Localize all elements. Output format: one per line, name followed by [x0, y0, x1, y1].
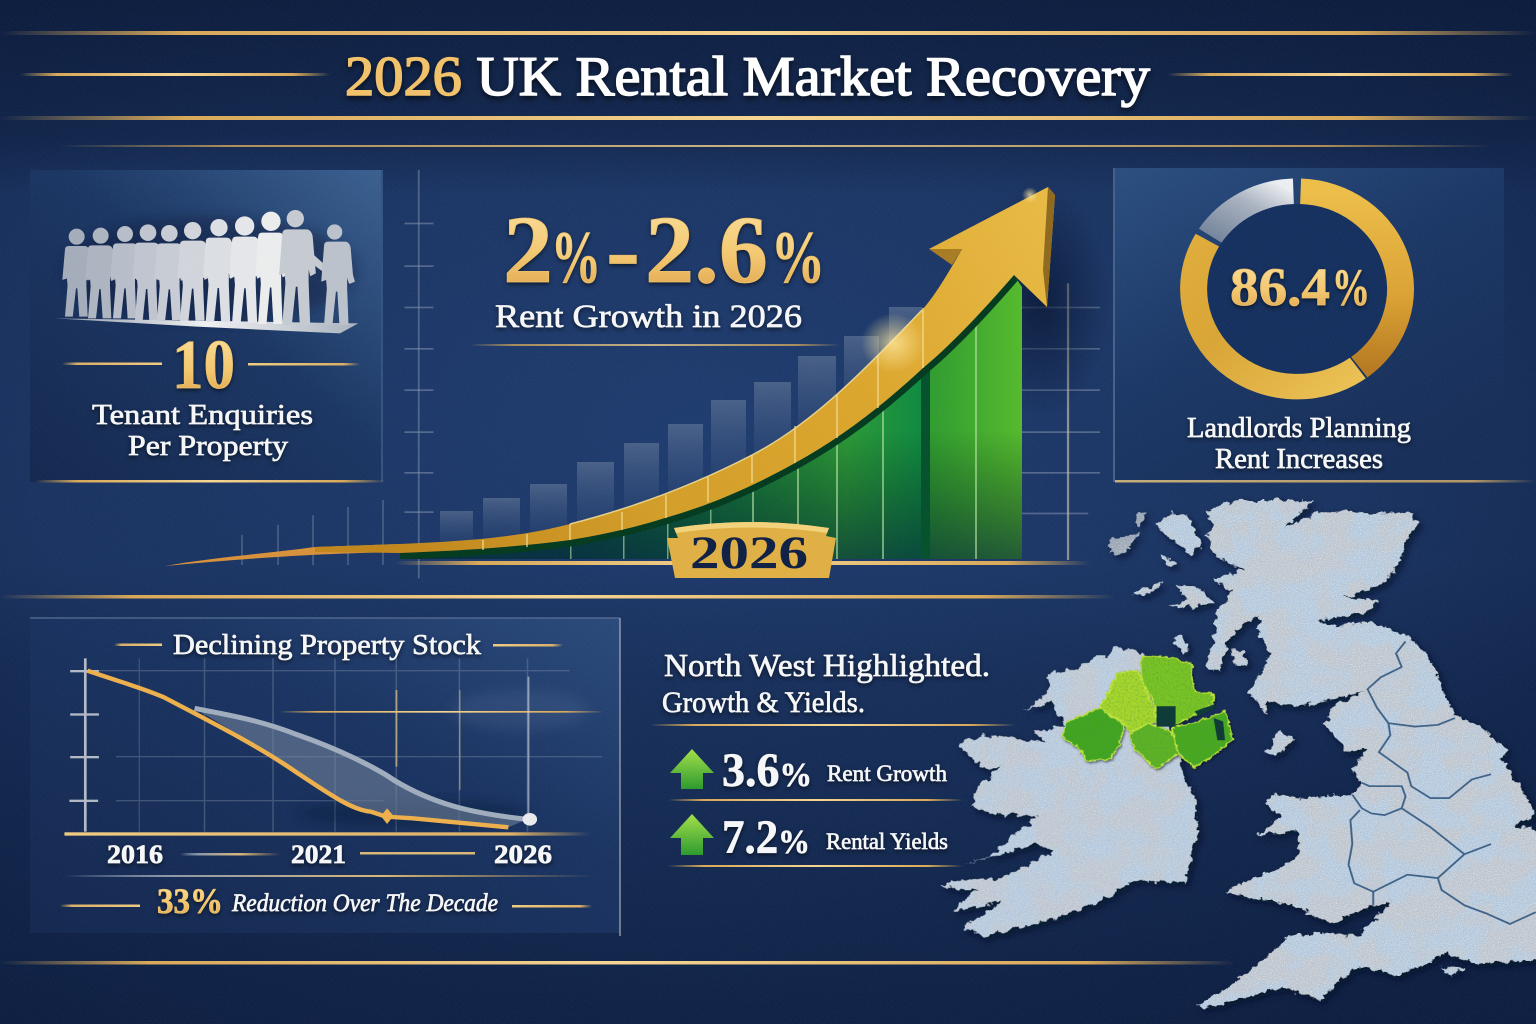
line chart: [64, 658, 604, 836]
callout: 33% reduction: [60, 881, 592, 921]
axis years: 2026: [494, 840, 552, 869]
label: tenant enquiries per property: Per Property: [128, 430, 289, 462]
small ticks left of chart: [241, 500, 384, 565]
stat: rent growth range: %: [771, 217, 825, 299]
heading: North West Highlighted.: [664, 647, 990, 683]
section rule: [0, 595, 1115, 598]
Lough Neagh and Strangford Lough: [1157, 704, 1225, 740]
Ireland: [940, 646, 1198, 936]
label: rent growth in 2026: Rent Growth in 2026: [495, 299, 802, 335]
green bars: [400, 270, 1022, 559]
label: landlords planning rent increases: [1187, 413, 1411, 475]
title: 2026 UK Rental Market Recovery: [345, 46, 1150, 108]
panel: landlords donut: [1113, 168, 1536, 482]
header rules: [0, 31, 1536, 147]
badge: 2026: [667, 522, 836, 579]
chart grid: [404, 170, 1100, 578]
bottom rule: [0, 961, 1235, 964]
heading: Declining Property Stock: [173, 629, 482, 661]
metric: rent growth: [668, 744, 963, 801]
label: tenant enquiries per property: [92, 399, 313, 462]
callout: 33% reduction: Reduction Over The Decade: [231, 890, 498, 917]
metric: rental yields: 7.2%: [722, 811, 810, 864]
England and Wales region borders: [1348, 641, 1536, 924]
axis years: 2016: [107, 840, 163, 869]
panel: rent growth chart: [165, 170, 1110, 579]
heading: [650, 647, 1015, 726]
metric: rental yields: Rental Yields: [826, 829, 948, 854]
panel: tenant enquiries: [30, 170, 385, 482]
panel: declining property stock: [30, 617, 621, 936]
metric: rent growth: 3.6%: [722, 744, 812, 797]
donut chart: [1194, 191, 1401, 387]
stat: 10: 10: [172, 327, 235, 404]
heading: Growth & Yields.: [662, 686, 865, 719]
label: landlords planning rent increases: Rent Increases: [1215, 444, 1383, 475]
stat: 86.4%: [1230, 257, 1370, 317]
baseline: [395, 561, 1090, 565]
stat: 86.4%: %: [1332, 260, 1370, 317]
icon: up arrow: [670, 814, 714, 855]
label: landlords planning rent increases: Landlords Planning: [1187, 413, 1411, 444]
stat: rent growth range: 2: [503, 196, 553, 303]
stat: rent growth range: %: [551, 217, 601, 299]
axis years: [107, 840, 552, 869]
grey bars: [440, 307, 922, 551]
metric: rent growth: Rent Growth: [827, 761, 947, 786]
axis years: 2021: [291, 840, 346, 869]
stat: rent growth range: 2.6: [645, 196, 768, 303]
stat: rent growth range: -: [606, 196, 640, 303]
arrow: rising gold trend: [165, 187, 1055, 566]
map: UK and Ireland: [940, 500, 1536, 1009]
shadow behind arrow: [970, 180, 1110, 420]
label: tenant enquiries per property: Tenant Enquiries: [92, 399, 313, 431]
panel: north west highlights: [650, 647, 1015, 867]
Northern Ireland highlighted: [1062, 657, 1233, 769]
badge: 2026: 2026: [690, 527, 808, 579]
metric: rental yields: [668, 811, 963, 867]
stat: 86.4%: 86.4: [1230, 257, 1330, 317]
stat: rent growth range: [503, 196, 825, 303]
icon: queue of people: [55, 210, 358, 333]
callout: 33% reduction: 33%: [157, 881, 223, 921]
Great Britain: [1109, 500, 1536, 1009]
icon: up arrow: [670, 749, 714, 789]
